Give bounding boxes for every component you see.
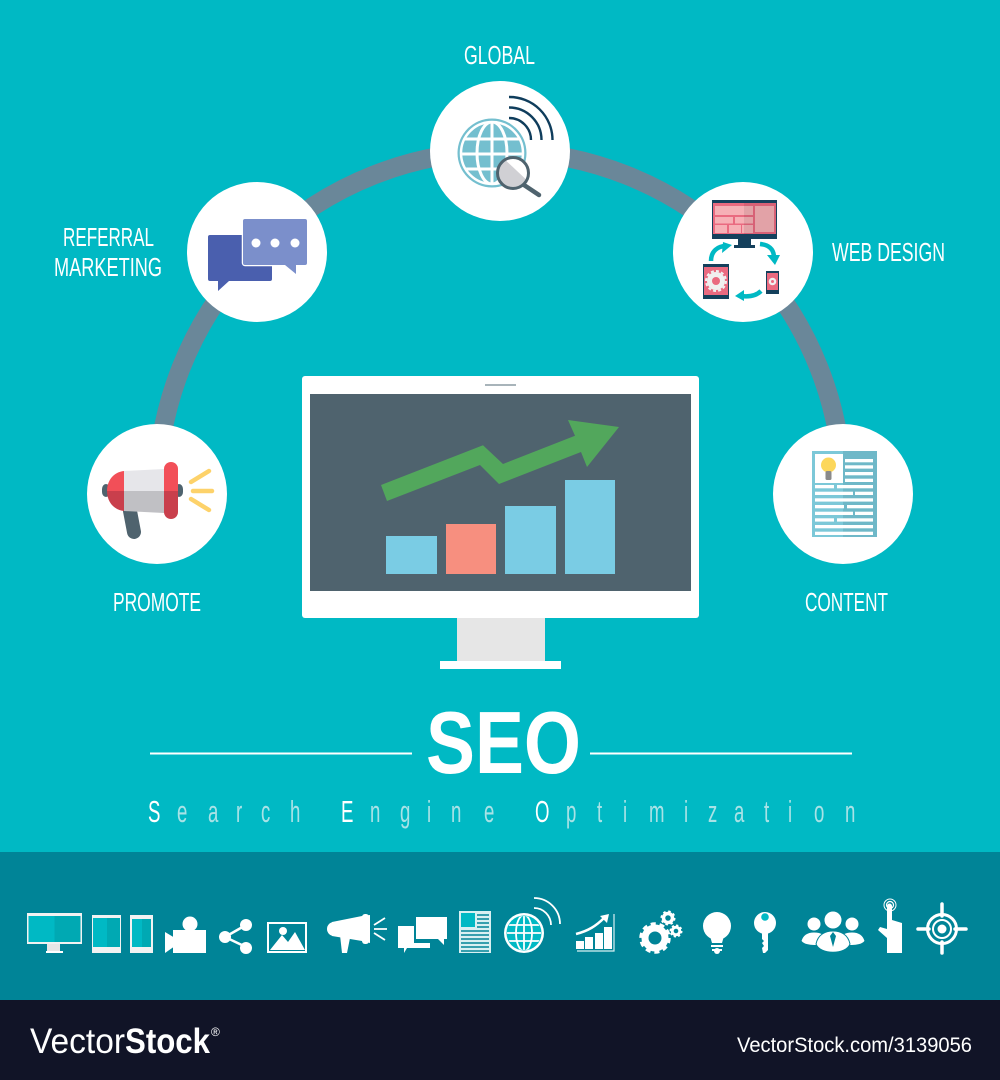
icon: document	[812, 451, 877, 537]
icon: share	[219, 919, 252, 954]
title: SEO	[426, 693, 581, 792]
label: global: GLOBAL	[464, 40, 535, 70]
icon: picture	[268, 923, 306, 952]
arc connecting the topics	[157, 151, 843, 494]
subtitle: ptimization	[566, 795, 855, 829]
label: promote: PROMOTE	[113, 587, 201, 617]
icon: desktop monitor	[712, 200, 777, 248]
icon: signal waves	[509, 97, 552, 140]
icon: megaphone	[327, 914, 387, 953]
icon: key	[754, 912, 776, 953]
logo: Vector	[30, 1022, 125, 1061]
icon: touch hand	[878, 899, 902, 953]
icon: gears	[641, 912, 682, 952]
bar chart	[386, 480, 615, 574]
icon: desktop	[27, 913, 82, 953]
icon: sync arrows	[711, 244, 774, 296]
icon: tablet	[92, 915, 121, 953]
icon: document	[459, 911, 491, 953]
icon: megaphone	[102, 462, 183, 532]
icon: video camera	[165, 916, 206, 953]
label: referral marketing: MARKETING	[54, 252, 162, 282]
logo	[30, 1022, 220, 1061]
growth arrow	[381, 420, 619, 501]
logo: Stock	[125, 1022, 210, 1061]
icon: sound rays	[191, 471, 212, 510]
icon: dark chat bubble	[208, 235, 272, 291]
icon: growth chart	[576, 914, 614, 951]
icon: phone	[130, 915, 153, 953]
node: referral marketing	[187, 182, 327, 322]
icon: phone	[766, 271, 779, 294]
label: referral marketing	[54, 222, 162, 282]
node: promote	[87, 424, 227, 564]
central monitor	[302, 376, 699, 669]
label: content: CONTENT	[805, 587, 888, 617]
icon: globe	[456, 118, 528, 188]
icon: light bulb	[821, 458, 836, 480]
subtitle: S	[148, 795, 160, 829]
bottom icon band	[0, 852, 1000, 1000]
subtitle: ngine	[370, 795, 494, 829]
icon: magnifier	[498, 155, 539, 195]
icon: dots	[252, 238, 300, 248]
node: global	[430, 81, 570, 221]
subtitle: E	[341, 795, 353, 829]
logo: ®	[211, 1025, 220, 1039]
icon: globe with waves	[504, 898, 560, 953]
icon: tablet	[703, 264, 729, 299]
subtitle: earch	[177, 795, 300, 829]
icon: light bulb	[703, 912, 731, 954]
icon: light chat bubble	[243, 219, 307, 274]
footer bar	[0, 1000, 1000, 1080]
icon: business people	[801, 911, 865, 952]
label: web design: WEB DESIGN	[832, 237, 945, 267]
node: content	[773, 424, 913, 564]
image id: VectorStock.com/3139056	[737, 1034, 972, 1057]
icon: chat bubbles	[398, 917, 447, 953]
subtitle: O	[535, 795, 549, 829]
icon: sync arrow heads	[722, 242, 780, 301]
label: referral marketing: REFERRAL	[63, 222, 154, 252]
node: web design	[673, 182, 813, 322]
icon: target	[918, 904, 966, 953]
